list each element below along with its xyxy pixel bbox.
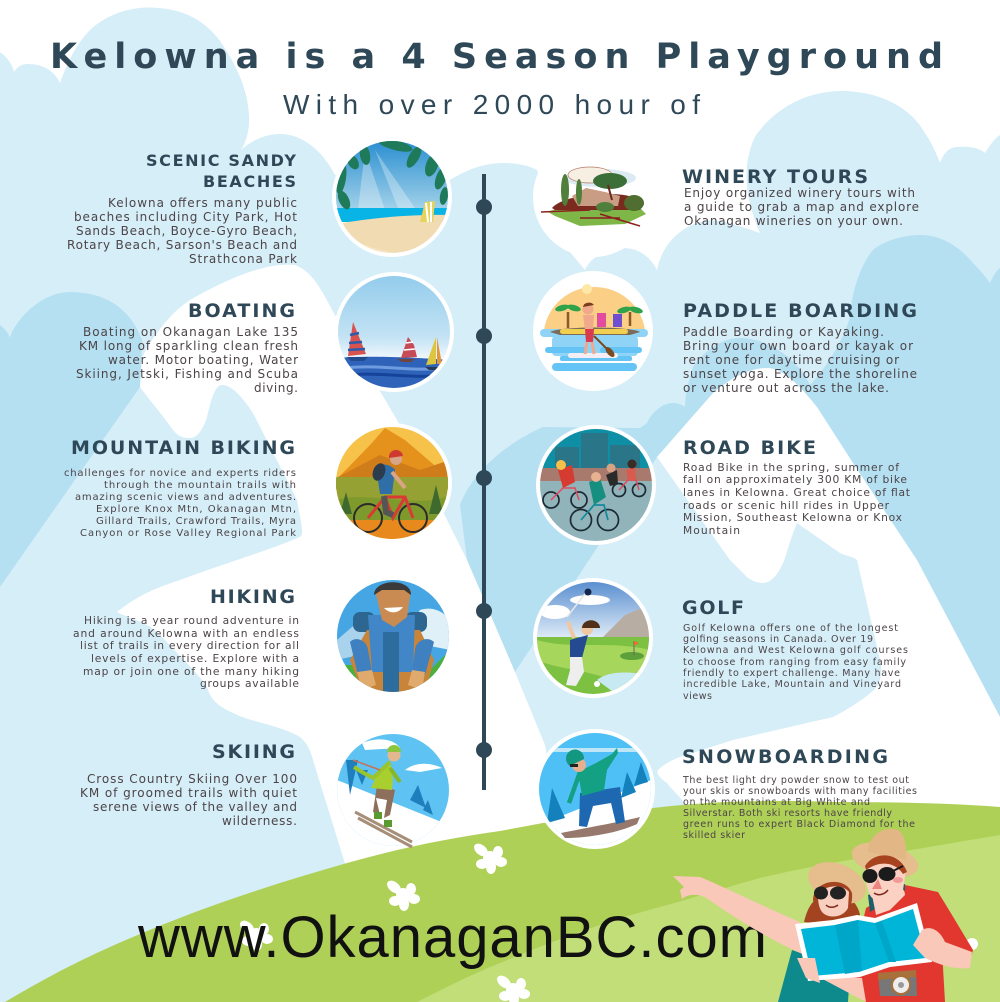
- text: golf: golfing seasons in Canada. Over 19: [683, 634, 873, 645]
- panel: skiing: [80, 734, 449, 850]
- text: skiing: Cross Country Skiing Over 100: [87, 772, 297, 786]
- heading: hiking: HIKING: [210, 586, 295, 608]
- text: mountain biking: Gillard Trails, Crawford Trails, Myra: [96, 516, 296, 527]
- text: winery tours: Enjoy organized winery tours with: [684, 186, 915, 200]
- text: hiking: levels of expertise. Explore with a: [91, 652, 299, 665]
- text: road bike: lanes in Kelowna. Great choice of flat: [683, 486, 910, 499]
- text: road bike: fall on approximately 300 KM of bike: [683, 473, 907, 486]
- text: boating: [76, 325, 298, 395]
- camera: [878, 970, 917, 996]
- heading: golf: GOLF: [682, 597, 744, 619]
- panel: winery tours: [533, 137, 919, 257]
- text: golf: to choose from ranging from easy family: [683, 657, 906, 668]
- green hills: [5, 801, 1000, 1002]
- text: beaches: beaches including City Park, Hot: [74, 210, 297, 224]
- panel: mountain biking: [64, 423, 452, 543]
- text: beaches: [67, 196, 297, 266]
- text: paddle boarding: or venture out across the lake.: [683, 381, 889, 395]
- icon: skier: [337, 734, 449, 850]
- panel: paddle boarding: [533, 271, 917, 395]
- text: hiking: map or join one of the many hiking: [83, 665, 299, 678]
- hands: [797, 928, 972, 983]
- text: golf: incredible Lake, Mountain and Vineyard: [683, 679, 901, 690]
- icon: beach: [332, 136, 452, 257]
- heading: scenic sandy beaches: BEACHES: [203, 172, 296, 191]
- heading: winery tours: WINERY TOURS: [682, 166, 868, 188]
- panel: golf: [533, 578, 908, 702]
- text: golf: Kelowna and West Kelowna golf courses: [683, 645, 908, 656]
- icon: golfer: [533, 578, 653, 698]
- text: skiing: serene views of the valley and: [93, 800, 297, 814]
- pointing arm: [673, 876, 805, 955]
- text: paddle boarding: sunset yoga. Explore the shoreline: [683, 367, 917, 381]
- icon: mountain biker: [332, 423, 452, 543]
- text: beaches: Kelowna offers many public: [108, 196, 297, 210]
- text: beaches: Sands Beach, Boyce-Gyro Beach,: [76, 224, 297, 238]
- text: golf: friendly to expert challenge. Many have: [683, 668, 900, 679]
- text: golf: views: [683, 691, 712, 702]
- text: hiking: Hiking is a year round adventure in: [84, 614, 299, 627]
- panel: boating: [76, 272, 454, 395]
- panel: scenic sandy beaches: [67, 136, 452, 266]
- text: mountain biking: [64, 468, 296, 539]
- text: skiing: KM of groomed trails with quiet: [80, 786, 297, 800]
- timeline with dots: [476, 174, 492, 790]
- text: boating: water. Motor boating, Water: [108, 353, 298, 367]
- text: road bike: [683, 461, 910, 537]
- text: snowboarding: on the mountains at Big White and: [683, 797, 870, 808]
- text: skiing: wilderness.: [222, 814, 297, 828]
- text: paddle boarding: Bring your own board or kayak or: [683, 339, 913, 353]
- text: hiking: groups available: [200, 677, 299, 690]
- heading: skiing: SKIING: [212, 741, 295, 763]
- text: boating: Skiing, Jetski, Fishing and Scuba: [76, 367, 298, 381]
- text: skiing: [80, 772, 297, 828]
- text: snowboarding: [682, 775, 917, 841]
- text: boating: KM long of sparkling clean fresh: [79, 339, 298, 353]
- text: paddle boarding: [683, 325, 917, 395]
- icon: hiker: [337, 580, 450, 692]
- text: hiking: [73, 614, 299, 690]
- text: winery tours: [684, 186, 919, 228]
- text: golf: [683, 623, 908, 702]
- text: road bike: Mountain: [683, 524, 740, 537]
- panel: road bike: [536, 425, 910, 545]
- heading: paddle boarding: PADDLE BOARDING: [683, 300, 917, 322]
- text: beaches: Strathcona Park: [189, 252, 297, 266]
- text: boating: Boating on Okanagan Lake 135: [83, 325, 298, 339]
- text: paddle boarding: Paddle Boarding or Kayaking.: [683, 325, 884, 339]
- text: mountain biking: Canyon or Rose Valley Regional Park: [80, 528, 296, 539]
- icon: paddle boarder: [533, 271, 653, 391]
- text: road bike: roads or scenic hill rides in Upper: [683, 499, 890, 512]
- map: [795, 903, 932, 981]
- website url: www.OkanaganBC.com: [137, 905, 767, 970]
- text: road bike: Mission, Southeast Kelowna or Knox: [683, 511, 902, 524]
- heading: scenic sandy beaches: [146, 151, 296, 191]
- heading: mountain biking: MOUNTAIN BIKING: [71, 437, 295, 459]
- icon: winery landscape: [533, 137, 653, 257]
- text: mountain biking: amazing scenic views and adventures.: [75, 492, 296, 503]
- heading: snowboarding: SNOWBOARDING: [682, 746, 888, 768]
- icon: road cyclists: [536, 425, 656, 545]
- text: road bike: Road Bike in the spring, summer of: [683, 461, 899, 474]
- panel: snowboarding: [535, 729, 917, 850]
- text: mountain biking: through the mountain trails with: [104, 480, 296, 491]
- text: winery tours: Okanagan wineries on your own.: [684, 214, 903, 228]
- text: snowboarding: The best light dry powder snow to test out: [682, 775, 909, 786]
- panel: hiking: [73, 580, 450, 692]
- text: paddle boarding: rent one for daytime cruising or: [683, 353, 899, 367]
- icon: sailboats: [334, 272, 454, 392]
- text: mountain biking: challenges for novice and experts riders: [64, 468, 296, 479]
- heading: scenic sandy beaches: SCENIC SANDY: [146, 151, 296, 170]
- lower arm: [815, 975, 866, 1002]
- title: Kelowna is a 4 Season Playground: [50, 37, 943, 77]
- text: boating: diving.: [254, 381, 298, 395]
- text: snowboarding: skilled skier: [683, 830, 745, 841]
- woman: [778, 854, 872, 1002]
- text: hiking: and around Kelowna with an endless: [73, 627, 299, 640]
- man: [848, 829, 973, 1002]
- heading: road bike: ROAD BIKE: [683, 437, 816, 459]
- text: snowboarding: your skis or snowboards with many facilities: [683, 786, 917, 797]
- text: mountain biking: Explore Knox Mtn, Okanagan Mtn,: [96, 504, 296, 515]
- text: beaches: Rotary Beach, Sarson's Beach and: [67, 238, 297, 252]
- text: hiking: list of trails in every direction for all: [80, 639, 299, 652]
- icon: snowboarder: [535, 729, 655, 850]
- text: snowboarding: green runs to expert Black Diamond for the: [683, 819, 915, 830]
- text: golf: Golf Kelowna offers one of the longest: [683, 623, 898, 634]
- illustration: tourist couple with map: [673, 829, 973, 1002]
- heading: boating: BOATING: [188, 300, 295, 322]
- subtitle: With over 2000 hour of: [283, 89, 700, 120]
- text: snowboarding: Silverstar. Both ski resorts have friendly: [683, 808, 892, 819]
- text: winery tours: a guide to grab a map and explore: [684, 200, 919, 214]
